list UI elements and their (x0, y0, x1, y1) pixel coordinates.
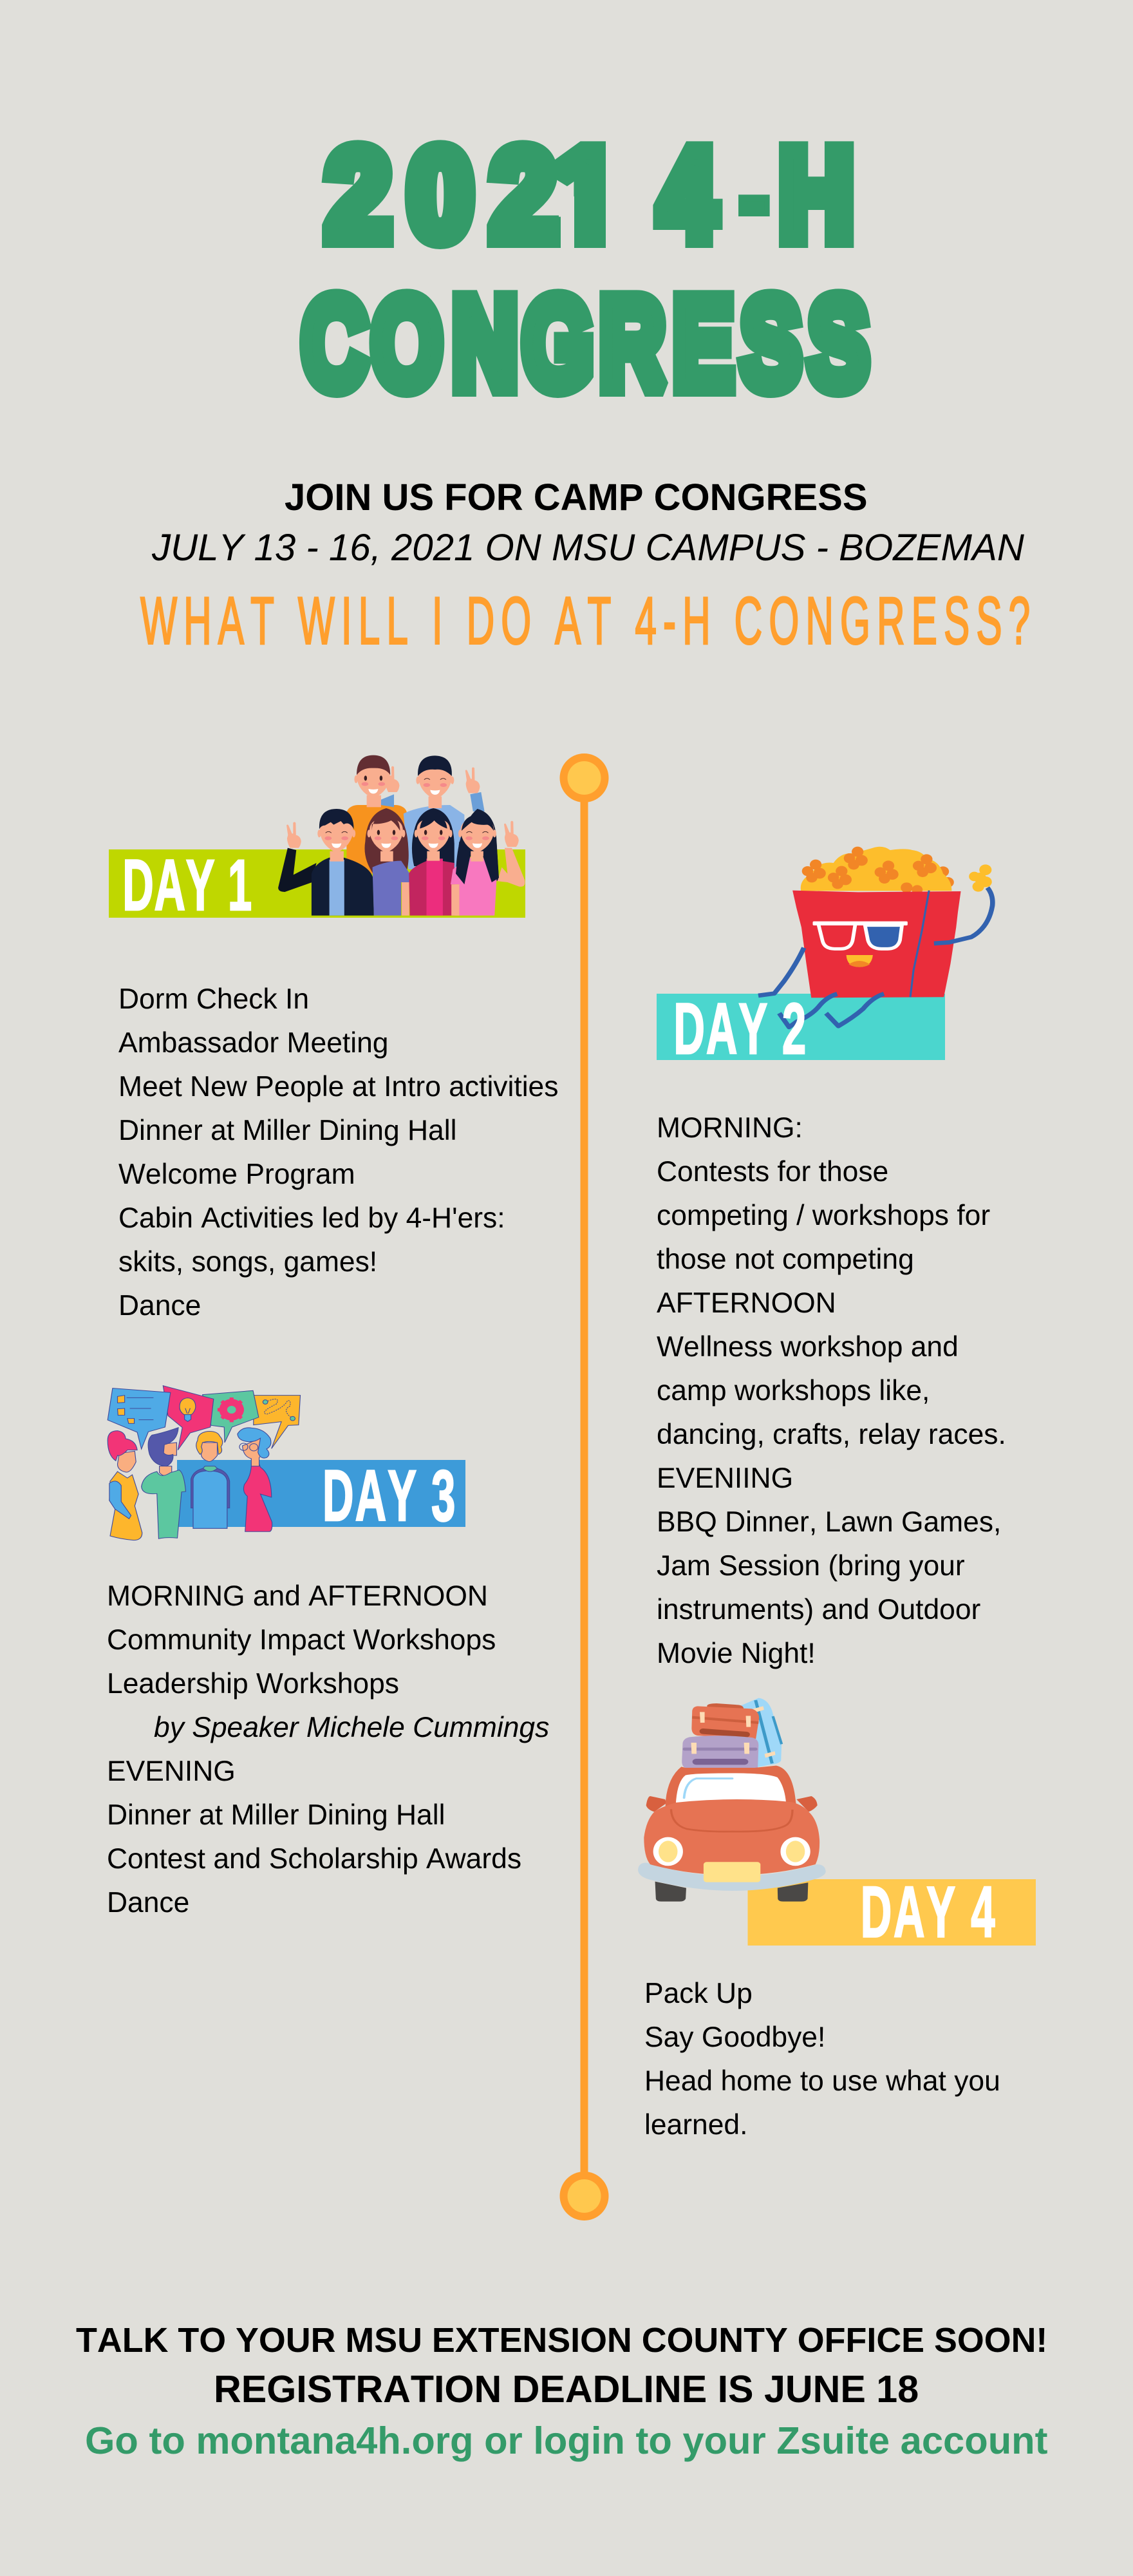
title (302, 123, 868, 415)
day 3 list: Contest and Scholarship Awards (107, 1843, 521, 1875)
day 1 list: Ambassador Meeting (118, 1027, 388, 1059)
day 2 list: BBQ Dinner, Lawn Games, (657, 1506, 1001, 1538)
day 3 list: EVENING (107, 1756, 236, 1787)
day 4 list: Say Goodbye! (644, 2022, 825, 2053)
day 2 list (657, 1112, 1006, 1669)
panel: day 2 (657, 847, 1006, 1669)
icon: people with speech bubbles (108, 1386, 300, 1540)
day 3 list: Leadership Workshops (107, 1668, 399, 1700)
day 4 label: DAY 4 (861, 1871, 995, 1953)
day 3 list: by Speaker Michele Cummings (154, 1712, 549, 1743)
day 1 list: Dance (118, 1290, 201, 1321)
title: 2021 (326, 123, 619, 267)
day 3 list: Community Impact Workshops (107, 1624, 496, 1656)
question heading: WHAT WILL I DO AT 4-H CONGRESS? (140, 584, 1030, 659)
day 4 banner (748, 1879, 1036, 1946)
day 2 list: camp workshops like, (657, 1375, 930, 1406)
day 2 banner (657, 994, 945, 1060)
timeline end dot (560, 2172, 609, 2221)
footer: call to action: REGISTRATION DEADLINE IS JUNE 18 (214, 2367, 919, 2410)
day 2 list: competing / workshops for (657, 1200, 990, 1231)
day 4 list: learned. (644, 2109, 747, 2141)
day 1 list: Dorm Check In (118, 983, 309, 1015)
day 3 banner (177, 1460, 465, 1527)
day 1 list: Welcome Program (118, 1159, 355, 1190)
footer: call to action: Go to montana4h.org or login to your Zsuite account (85, 2419, 1048, 2462)
day 2 list: instruments) and Outdoor (657, 1594, 981, 1625)
day 1 list: Meet New People at Intro activities (118, 1071, 558, 1103)
title: CONGRESS (302, 271, 868, 415)
day 3 list (107, 1580, 549, 1918)
day 1 list (118, 983, 558, 1321)
day 1 list: skits, songs, games! (118, 1246, 377, 1278)
day 4 list: Head home to use what you (644, 2065, 1000, 2097)
day 2 list: those not competing (657, 1244, 914, 1275)
day 3 list: MORNING and AFTERNOON (107, 1580, 488, 1612)
day 2 list: Jam Session (bring your (657, 1550, 965, 1582)
day 1 list: Cabin Activities led by 4-H'ers: (118, 1202, 505, 1234)
day 1 banner (109, 849, 525, 918)
dates line: JULY 13 - 16, 2021 ON MSU CAMPUS - BOZEMAN (151, 527, 1025, 569)
icon: car with luggage (638, 1698, 826, 1902)
day 4 list: Pack Up (644, 1978, 753, 2009)
day 2 list: AFTERNOON (657, 1287, 836, 1319)
timeline start dot (560, 753, 609, 802)
subtitle: join us: JOIN US FOR CAMP CONGRESS (285, 477, 868, 518)
day 2 list: MORNING: (657, 1112, 803, 1144)
title: 4-H (659, 123, 854, 267)
day 1 list: Dinner at Miller Dining Hall (118, 1115, 456, 1146)
day 3 label: DAY 3 (323, 1455, 455, 1536)
panel: day 4 (638, 1698, 1036, 2141)
day 3 list: Dance (107, 1887, 189, 1918)
footer: call to action (76, 2321, 1048, 2462)
day 1 label: DAY 1 (122, 844, 252, 925)
icon: group of friends (278, 755, 525, 916)
footer: call to action: TALK TO YOUR MSU EXTENSION COUNTY OFFICE SOON! (76, 2321, 1047, 2360)
day 2 label: DAY 2 (673, 988, 806, 1069)
day 2 list: dancing, crafts, relay races. (657, 1419, 1006, 1450)
day 2 list: Contests for those (657, 1156, 888, 1188)
day 3 list: Dinner at Miller Dining Hall (107, 1799, 445, 1831)
panel: day 1 (109, 755, 558, 1321)
panel: day 3 (107, 1386, 549, 1918)
day 4 list (644, 1978, 1000, 2141)
icon: popcorn character (758, 847, 993, 1027)
day 2 list: Wellness workshop and (657, 1331, 959, 1363)
day 2 list: Movie Night! (657, 1638, 816, 1669)
timeline (560, 753, 609, 2221)
day 2 list: EVENIING (657, 1463, 793, 1494)
